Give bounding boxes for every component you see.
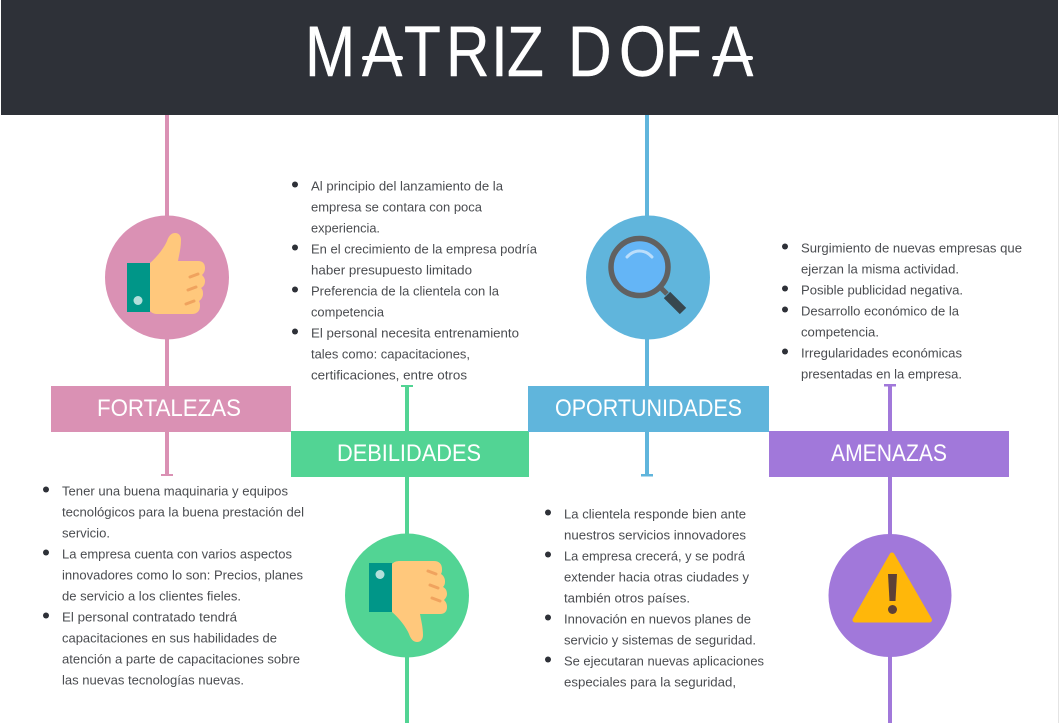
text block: debilidades list: En el crecimiento de la empresa podría <box>311 242 538 256</box>
text block: fortalezas list: innovadores como lo son: Precios, planes <box>62 568 303 582</box>
text block: amenazas list: Surgimiento de nuevas empresas que <box>801 240 1022 256</box>
title: MATRIZ DOFA <box>305 11 753 91</box>
icon: magnifying glass <box>586 216 710 340</box>
label: amenazas: AMENAZAS <box>831 440 947 467</box>
text block: oportunidades list: nuestros servicios innovadores <box>564 528 747 542</box>
text block: amenazas list: Desarrollo económico de la <box>801 304 960 318</box>
text block: fortalezas list: de servicio a los clientes fieles. <box>62 588 241 604</box>
text block: debilidades list: haber presupuesto limitado <box>311 262 472 278</box>
text block: oportunidades list: Innovación en nuevos planes de <box>564 612 751 626</box>
text block: oportunidades list: servicio y sistemas de seguridad. <box>564 632 756 648</box>
panel: amenazas <box>769 240 1022 723</box>
text block: debilidades list <box>292 178 538 382</box>
text block: oportunidades list <box>545 506 764 690</box>
icon: warning triangle <box>828 534 952 657</box>
panel: oportunidades <box>528 115 769 690</box>
connector: fortalezas timeline <box>161 115 173 476</box>
text block: amenazas list: Posible publicidad negativa. <box>801 282 963 298</box>
connector: oportunidades timeline <box>641 115 653 476</box>
text block: fortalezas list: Tener una buena maquinaria y equipos <box>62 484 288 498</box>
text block: amenazas list: competencia. <box>801 324 879 340</box>
icon: thumbs up <box>105 216 229 340</box>
text block: fortalezas list: tecnológicos para la buena prestación del <box>62 504 304 520</box>
label: debilidades: DEBILIDADES <box>337 440 481 467</box>
text block: amenazas list <box>782 240 1022 382</box>
text block: oportunidades list: especiales para la seguridad, <box>564 674 736 690</box>
text block: oportunidades list: extender hacia otras ciudades y <box>564 570 749 584</box>
icon: thumbs down <box>345 534 469 658</box>
text block: debilidades list: Al principio del lanzamiento de la <box>311 178 504 194</box>
text block: amenazas list: presentadas en la empresa. <box>801 366 962 382</box>
text block: fortalezas list: capacitaciones en sus habilidades de <box>62 630 277 646</box>
label: oportunidades <box>528 386 769 432</box>
connector: amenazas timeline <box>884 384 896 723</box>
text block: fortalezas list: atención a parte de capacitaciones sobre <box>62 652 300 666</box>
connector: debilidades timeline <box>401 385 413 723</box>
text block: debilidades list: experiencia. <box>311 220 380 236</box>
text block: fortalezas list: El personal contratado tendrá <box>62 610 238 624</box>
text block: oportunidades list: también otros países. <box>564 590 690 606</box>
header banner with title <box>1 0 1058 115</box>
text block: amenazas list: Irregularidades económicas <box>801 346 962 360</box>
label: fortalezas: FORTALEZAS <box>97 395 241 422</box>
text block: fortalezas list <box>43 484 304 688</box>
text block: debilidades list: empresa se contara con poca <box>311 200 483 214</box>
text block: debilidades list: certificaciones, entre otros <box>311 368 468 382</box>
label: debilidades <box>291 431 529 477</box>
text block: oportunidades list: La clientela responde bien ante <box>564 506 746 522</box>
panel: debilidades <box>291 178 538 723</box>
text block: debilidades list: Preferencia de la clientela con la <box>311 284 500 298</box>
label: oportunidades: OPORTUNIDADES <box>555 395 742 422</box>
text block: fortalezas list: La empresa cuenta con varios aspectos <box>62 546 292 562</box>
text block: debilidades list: tales como: capacitaciones, <box>311 346 470 362</box>
label: amenazas <box>769 431 1009 477</box>
text block: fortalezas list: servicio. <box>62 526 110 540</box>
text block: debilidades list: competencia <box>311 304 385 320</box>
panel: fortalezas <box>43 115 304 688</box>
text block: fortalezas list: las nuevas tecnologías nuevas. <box>62 672 244 688</box>
text block: debilidades list: El personal necesita entrenamiento <box>311 326 519 340</box>
text block: amenazas list: ejerzan la misma actividad. <box>801 262 959 276</box>
label: fortalezas <box>51 386 291 432</box>
text block: oportunidades list: La empresa crecerá, y se podrá <box>564 548 746 564</box>
text block: oportunidades list: Se ejecutaran nuevas aplicaciones <box>564 654 764 668</box>
